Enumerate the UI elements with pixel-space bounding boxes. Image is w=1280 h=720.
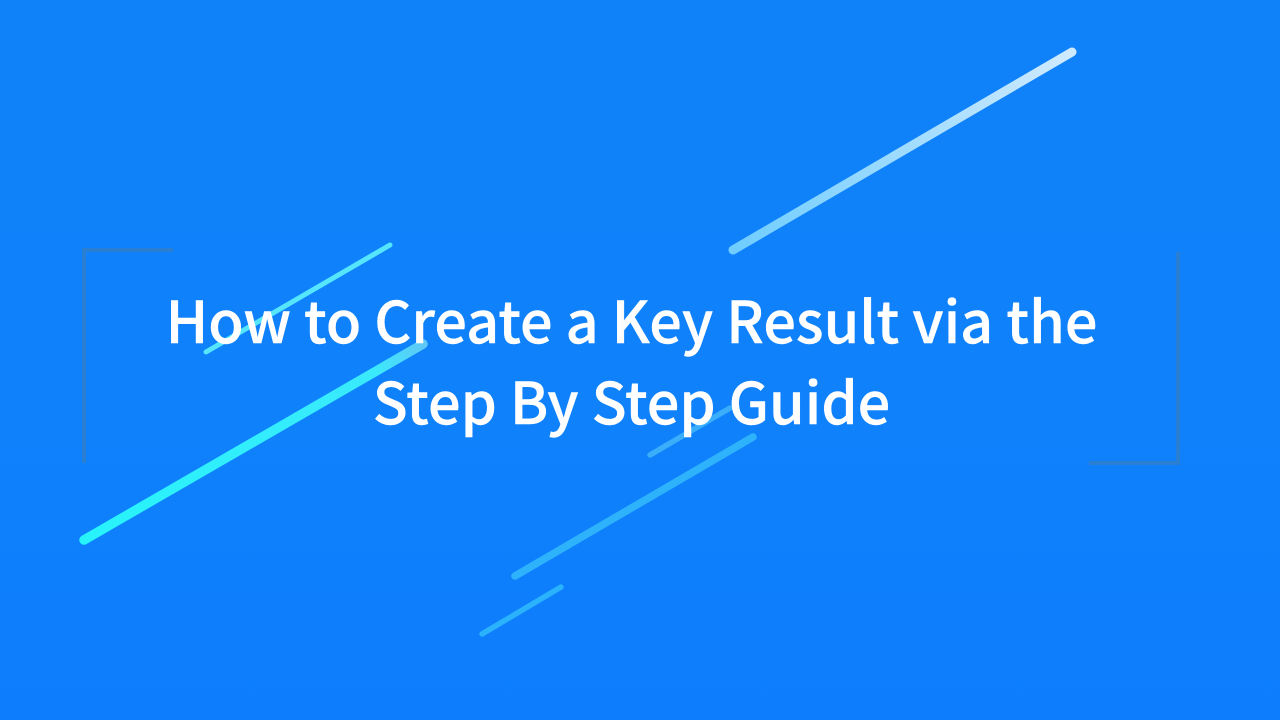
title: How to Create a Key Result via the	[166, 276, 1097, 360]
line: cyan thick lower left	[84, 344, 423, 540]
line: blue short centre	[650, 408, 730, 455]
line: cyan thin upper left	[206, 245, 390, 352]
bracket: bottom right	[1089, 252, 1178, 463]
line: blue short bottom	[482, 587, 561, 634]
bracket: top left	[84, 250, 173, 463]
title	[166, 276, 1097, 441]
line: blue long centre	[515, 437, 753, 576]
line: white top right	[733, 52, 1072, 250]
title: Step By Step Guide	[373, 357, 890, 441]
